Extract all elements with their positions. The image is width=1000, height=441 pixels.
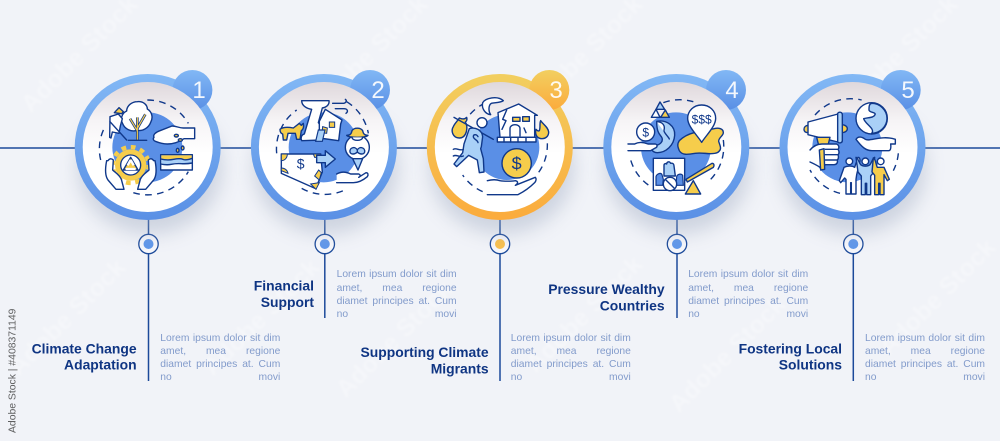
body text: step 5 (865, 332, 985, 383)
body text: step 5: amet, mea regione (865, 346, 985, 357)
body text: step 4: Lorem ipsum dolor sit dim (688, 269, 808, 280)
number 4: 4 (725, 77, 739, 104)
icon: pressure wealthy countries: $ (642, 125, 649, 139)
number 5: 5 (901, 77, 915, 104)
heading: Pressure Wealthy Countries: Pressure Wealthy (548, 281, 665, 297)
body text: step 1 (160, 332, 280, 383)
step 5 circle (780, 70, 926, 234)
body text: step 2: amet, mea regione (337, 283, 457, 294)
step 1 connector and marker (139, 215, 158, 381)
stock credit: Adobe Stock | #408371149 (8, 308, 18, 433)
icon: climate migrants (452, 98, 549, 195)
icon: fostering local solutions (804, 99, 898, 195)
body text: step 3: amet, mea regione (511, 346, 631, 357)
body text: step 2: Lorem ipsum dolor sit dim (337, 269, 457, 280)
heading: Pressure Wealthy Countries: Countries (600, 298, 665, 314)
step 3 connector and marker (490, 215, 510, 381)
icon: climate adaptation (99, 100, 195, 195)
body text: step 2: diamet principes at. Cum (337, 296, 457, 307)
watermark: Adobe Stock (873, 233, 1000, 361)
watermark: Adobe Stock (520, 250, 648, 378)
number 2: 2 (371, 77, 385, 104)
icon: financial support: $ (297, 155, 305, 171)
body text: step 4: no movi (688, 309, 808, 320)
icon: pressure wealthy countries (628, 100, 724, 194)
step 2 connector and marker (315, 215, 334, 318)
heading: Fostering Local Solutions: Solutions (779, 357, 842, 373)
watermark: Adobe Stock (663, 290, 791, 418)
heading: Supporting Climate Migrants: Supporting Climate (360, 344, 489, 360)
body text: step 5: no movi (865, 372, 985, 383)
heading: Climate Change Adaptation: Adaptation (64, 357, 137, 373)
icon: pressure wealthy countries: $$$ (692, 112, 712, 126)
icon: climate migrants: $ (512, 154, 522, 174)
heading: Fostering Local Solutions: Fostering Local (739, 340, 842, 356)
body text: step 1: diamet principes at. Cum (160, 359, 280, 370)
body text: step 3: Lorem ipsum dolor sit dim (511, 332, 631, 344)
body text: step 4: amet, mea regione (688, 283, 808, 294)
watermark: Adobe Stock (197, 253, 325, 381)
step 5 connector and marker (844, 215, 863, 381)
icon: financial support (276, 99, 369, 194)
body text: step 3: diamet principes at. Cum (511, 359, 631, 370)
heading: Climate Change Adaptation: Climate Change (32, 340, 137, 356)
body text: step 2 (337, 269, 457, 320)
horizontal timeline line (0, 147, 1000, 149)
body text: step 3 (511, 332, 631, 383)
step 4 connector and marker (667, 215, 687, 318)
body text: step 1: no movi (160, 372, 280, 383)
body text: step 4: diamet principes at. Cum (688, 296, 808, 307)
body text: step 3: no movi (511, 372, 631, 383)
step 2 circle (251, 70, 398, 234)
body text: step 4 (688, 269, 808, 320)
body text: step 1: Lorem ipsum dolor sit dim (160, 332, 280, 344)
watermark: Adobe Stock (330, 275, 458, 403)
step 1 circle (75, 70, 222, 234)
body text: step 5: Lorem ipsum dolor sit dim (865, 332, 985, 344)
step 4 circle (603, 70, 750, 234)
step 3 circle (427, 70, 574, 234)
heading: Supporting Climate Migrants: Migrants (431, 360, 489, 376)
watermark: Adobe Stock (3, 253, 131, 381)
heading: Financial Support: Financial (254, 278, 314, 294)
heading: Financial Support: Support (261, 294, 314, 310)
body text: step 2: no movi (337, 309, 457, 320)
body text: step 5: diamet principes at. Cum (865, 359, 985, 370)
number 3: 3 (549, 77, 563, 104)
number 1: 1 (192, 77, 206, 104)
body text: step 1: amet, mea regione (160, 346, 280, 357)
